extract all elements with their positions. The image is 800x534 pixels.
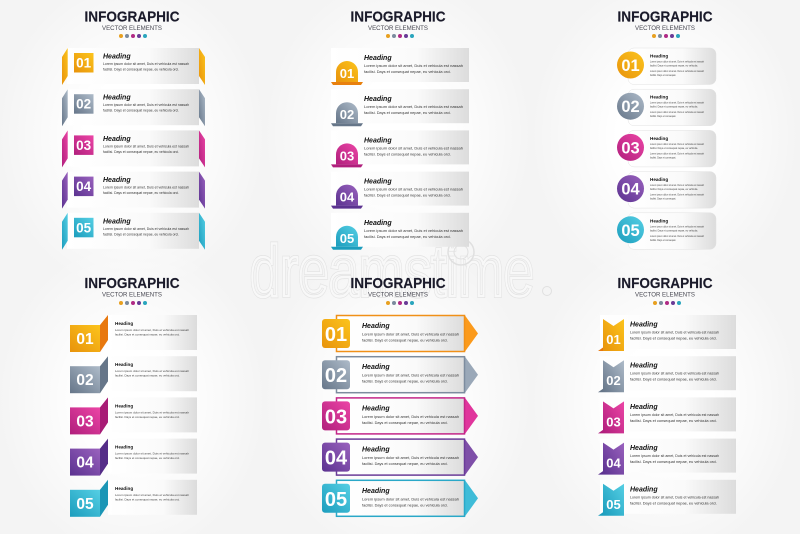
row 01: Lorem ipsum dolor sit amet. Duis et vehicula est nassah xyxy=(650,60,704,64)
row 02: facilisi. Days et consequat nepae, eu vehicula orci. xyxy=(362,380,448,384)
row 04: Lorem ipsum dolor sit amet. Duis et vehicula est nassah xyxy=(650,183,704,187)
row 02 xyxy=(598,356,736,392)
title: VECTOR ELEMENTS xyxy=(368,292,429,298)
row 04: 04 xyxy=(621,181,640,199)
row 03: 03 xyxy=(621,139,640,157)
row 03: Lorem ipsum dolor sit amet, Duis et vehicula est nassah xyxy=(364,146,463,150)
row 01: 01 xyxy=(76,56,92,70)
row 01 xyxy=(331,48,469,85)
row 02: 02 xyxy=(76,372,94,389)
row 02: Lorem ipsum dolor sit amet, Duis et vehicula est nassah xyxy=(115,369,189,373)
row 02 xyxy=(617,89,716,126)
row 03: Lorem ipsum dolor sit amet, Duis et vehicula est nassah xyxy=(630,413,719,417)
row 05: facilisi. Days et consequat nepae, eu vehicula. xyxy=(650,228,698,232)
row 04: Heading xyxy=(115,445,133,450)
row 02: Lorem ipsum dolor sit amet, Duis et vehicula est nassah xyxy=(364,105,463,109)
row 03: facilisi. Days et consequat nepae, eu vehicula orci. xyxy=(362,421,448,425)
row 01: facilisi. Days et consequat nepae, eu vehicula orci. xyxy=(364,70,451,74)
row 01 xyxy=(598,315,736,351)
row 05: Lorem ipsum dolor sit amet, Duis et vehicula est nassah xyxy=(364,229,463,233)
row 05: Lorem ipsum dolor sit amet, Duis et vehicula est nassah xyxy=(103,227,189,231)
row 05: 05 xyxy=(606,497,621,512)
row 02: 02 xyxy=(340,107,354,122)
row 03: Lorem ipsum dolor sit amet. Duis et vehicula est nassah xyxy=(650,151,704,155)
row 04 xyxy=(322,439,478,475)
row 04 xyxy=(62,172,205,209)
row 01: Heading xyxy=(364,55,392,62)
row 03: Heading xyxy=(650,136,668,141)
row 03: 03 xyxy=(325,406,347,428)
row 01: Lorem ipsum dolor sit amet. Duis et vehicula est nassah xyxy=(650,69,704,73)
row 02: Heading xyxy=(364,96,392,103)
row 04: Lorem ipsum dolor sit amet, Duis et vehicula est nassah xyxy=(364,188,463,192)
panel: bell badge list xyxy=(331,8,469,250)
row 03: facilisi. Days et consequat. xyxy=(650,155,676,159)
title: VECTOR ELEMENTS xyxy=(102,25,163,32)
row 02 xyxy=(70,356,197,393)
row 01: facilisi. Days et consequat nepae, eu vehicula orci. xyxy=(103,68,179,72)
row 02: Lorem ipsum dolor sit amet. Duis et vehicula est nassah xyxy=(650,101,704,105)
row 04 xyxy=(331,172,469,209)
row 02: Heading xyxy=(630,363,658,370)
row 05: Heading xyxy=(364,220,392,227)
row 04: facilisi. Days et consequat nepae, eu vehicula orci. xyxy=(630,460,717,464)
row 05: Lorem ipsum dolor sit amet. Duis et vehicula est nassah xyxy=(650,224,704,228)
row 03: 03 xyxy=(606,414,621,429)
row 02: facilisi. Days et consequat nepae, eu vehicula orci. xyxy=(364,111,451,115)
row 02: Heading xyxy=(362,364,390,371)
row 05: 05 xyxy=(325,489,347,511)
panel: ribbon-fold list xyxy=(62,8,205,250)
row 01: Heading xyxy=(650,54,668,58)
title xyxy=(618,8,713,38)
row 05: Lorem ipsum dolor sit amet. Duis et vehicula est nassah xyxy=(650,234,704,238)
row 02: 02 xyxy=(621,98,640,116)
title xyxy=(84,275,180,305)
row 02: Heading xyxy=(115,362,133,367)
title: INFOGRAPHIC xyxy=(618,275,713,292)
row 02 xyxy=(322,357,478,393)
row 01 xyxy=(617,48,716,84)
row 03: 03 xyxy=(76,413,94,430)
row 04: 04 xyxy=(325,448,348,470)
row 05 xyxy=(322,480,478,516)
row 01: facilisi. Days et consequat nepae, eu vehicula orci. xyxy=(362,338,448,342)
row 05: facilisi. Days et consequat nepae, eu vehicula orci. xyxy=(103,232,179,236)
row 04: facilisi. Days et consequat nepae, eu vehicula orci. xyxy=(362,462,448,466)
row 05 xyxy=(617,213,716,249)
title: INFOGRAPHIC xyxy=(84,8,180,26)
row 02: Lorem ipsum dolor sit amet, Duis et vehicula est nassah xyxy=(630,372,719,376)
row 03 xyxy=(598,397,736,433)
row 03: facilisi. Days et consequat nepae, eu vehicula orci. xyxy=(103,150,179,154)
row 05: Heading xyxy=(362,488,390,495)
row 01 xyxy=(70,315,197,352)
row 02: facilisi. Days et consequat nepae, eu vehicula orci. xyxy=(115,374,180,378)
row 01: 01 xyxy=(340,66,354,81)
row 05: Heading xyxy=(115,486,133,491)
row 02: Lorem ipsum dolor sit amet, Duis et vehicula est nassah xyxy=(103,103,189,107)
row 02: facilisi. Days et consequat nepae, eu vehicula. xyxy=(650,105,698,109)
row 05: facilisi. Days et consequat. xyxy=(650,238,676,242)
row 04: Heading xyxy=(362,447,390,454)
row 02: 02 xyxy=(606,373,621,388)
row 04: Lorem ipsum dolor sit amet, Duis et vehicula est nassah xyxy=(630,454,719,458)
row 04: 04 xyxy=(76,179,92,194)
row 01: facilisi. Days et consequat nepae, eu vehicula orci. xyxy=(630,336,717,340)
title xyxy=(350,8,446,38)
row 05: facilisi. Days et consequat nepae, eu vehicula orci. xyxy=(630,501,717,505)
title: VECTOR ELEMENTS xyxy=(102,292,163,298)
row 05: facilisi. Days et consequat nepae, eu vehicula orci. xyxy=(115,497,180,501)
row 02: 02 xyxy=(325,365,347,387)
title: INFOGRAPHIC xyxy=(618,8,713,26)
title: INFOGRAPHIC xyxy=(350,275,446,292)
watermark: dreamstime xyxy=(250,232,534,312)
row 01: Heading xyxy=(115,321,133,326)
title xyxy=(618,275,713,305)
row 04: Lorem ipsum dolor sit amet, Duis et vehicula est nassah xyxy=(103,186,189,190)
row 05: facilisi. Days et consequat nepae, eu vehicula orci. xyxy=(362,503,448,507)
row 04: 04 xyxy=(340,190,355,205)
row 01: facilisi. Days et consequat nepae, eu vehicula orci. xyxy=(115,332,180,336)
row 02: Heading xyxy=(650,95,668,100)
row 04: Lorem ipsum dolor sit amet, Duis et vehicula est nassah xyxy=(362,456,459,460)
row 03: Lorem ipsum dolor sit amet, Duis et vehicula est nassah xyxy=(115,410,189,414)
row 02: facilisi. Days et consequat nepae, eu vehicula orci. xyxy=(103,109,179,113)
row 05: 05 xyxy=(340,231,354,246)
row 04 xyxy=(598,439,736,475)
row 03: Heading xyxy=(630,404,658,411)
title xyxy=(350,275,446,305)
row 01: Lorem ipsum dolor sit amet, Duis et vehicula est nassah xyxy=(103,62,189,66)
row 02: Lorem ipsum dolor sit amet. Duis et vehicula est nassah xyxy=(650,110,704,114)
row 01: Lorem ipsum dolor sit amet, Duis et vehicula est nassah xyxy=(630,330,719,334)
row 03: 03 xyxy=(340,148,354,163)
row 05: facilisi. Days et consequat nepae, eu vehicula orci. xyxy=(364,235,451,239)
row 05: Lorem ipsum dolor sit amet, Duis et vehicula est nassah xyxy=(630,495,719,499)
row 05 xyxy=(70,480,197,517)
row 04: 04 xyxy=(76,455,94,472)
row 03: facilisi. Days et consequat nepae, eu vehicula orci. xyxy=(115,415,180,419)
row 03: Heading xyxy=(115,403,133,408)
title: VECTOR ELEMENTS xyxy=(635,292,696,298)
row 01 xyxy=(322,316,478,352)
row 04: Heading xyxy=(103,177,131,184)
panel: circle badge list xyxy=(617,8,716,249)
row 02 xyxy=(331,89,469,126)
row 01: facilisi. Days et consequat nepae, eu vehicula. xyxy=(650,64,698,68)
row 03 xyxy=(62,130,205,167)
row 03: Heading xyxy=(103,136,131,143)
row 04: facilisi. Days et consequat nepae, eu vehicula orci. xyxy=(115,456,180,460)
row 05: Heading xyxy=(650,218,668,223)
row 04: facilisi. Days et consequat nepae, eu vehicula orci. xyxy=(364,194,451,198)
row 05: 05 xyxy=(76,220,92,235)
row 05: Lorem ipsum dolor sit amet, Duis et vehicula est nassah xyxy=(362,497,459,501)
row 01: Heading xyxy=(362,323,390,330)
panel: arrow list xyxy=(322,275,478,516)
row 01: Lorem ipsum dolor sit amet, Duis et vehicula est nassah xyxy=(115,328,189,332)
row 03 xyxy=(322,398,478,434)
row 02: Lorem ipsum dolor sit amet, Duis et vehicula est nassah xyxy=(362,374,459,378)
row 01: 01 xyxy=(76,331,94,348)
row 01: Heading xyxy=(630,322,658,328)
row 03: Heading xyxy=(364,137,392,144)
row 01: 01 xyxy=(621,57,640,75)
row 04: facilisi. Days et consequat nepae, eu vehicula. xyxy=(650,187,698,191)
title: VECTOR ELEMENTS xyxy=(635,25,696,32)
row 05 xyxy=(62,213,205,250)
panel: notched ribbon list xyxy=(598,275,736,516)
row 05: Heading xyxy=(630,486,658,493)
row 05: 05 xyxy=(621,222,640,240)
row 03: Lorem ipsum dolor sit amet, Duis et vehicula est nassah xyxy=(362,415,459,419)
row 04: 04 xyxy=(606,456,621,471)
row 01: facilisi. Days et consequat. xyxy=(650,73,676,77)
row 03 xyxy=(331,130,469,167)
row 01: 01 xyxy=(325,324,347,346)
title xyxy=(84,8,180,38)
row 02: 02 xyxy=(76,97,91,112)
row 02 xyxy=(62,89,205,126)
row 04 xyxy=(617,172,716,208)
row 01: Lorem ipsum dolor sit amet, Duis et vehicula est nassah xyxy=(364,64,463,68)
row 05 xyxy=(598,480,736,516)
row 02: facilisi. Days et consequat nepae, eu vehicula orci. xyxy=(630,378,717,382)
row 03: Heading xyxy=(362,405,390,412)
row 02: Heading xyxy=(103,95,131,102)
panel: 3D box list xyxy=(70,275,197,517)
row 04: Heading xyxy=(650,177,668,182)
title: VECTOR ELEMENTS xyxy=(368,25,429,32)
row 04: Heading xyxy=(630,445,658,452)
row 01 xyxy=(62,48,205,85)
title: INFOGRAPHIC xyxy=(350,8,446,26)
row 03: Lorem ipsum dolor sit amet. Duis et vehicula est nassah xyxy=(650,142,704,146)
row 02: facilisi. Days et consequat. xyxy=(650,114,676,118)
row 04: facilisi. Days et consequat. xyxy=(650,197,676,201)
row 01: Heading xyxy=(103,54,131,60)
row 04 xyxy=(70,439,197,476)
row 05: Heading xyxy=(103,218,131,225)
row 04: Lorem ipsum dolor sit amet. Duis et vehicula est nassah xyxy=(650,193,704,197)
row 03: facilisi. Days et consequat nepae, eu vehicula. xyxy=(650,146,698,150)
row 03 xyxy=(70,397,197,434)
row 04: facilisi. Days et consequat nepae, eu vehicula orci. xyxy=(103,191,179,195)
watermark: dreamstime xyxy=(250,232,534,312)
row 03: facilisi. Days et consequat nepae, eu vehicula orci. xyxy=(630,419,717,423)
row 04: Lorem ipsum dolor sit amet, Duis et vehicula est nassah xyxy=(115,452,189,456)
row 01: Lorem ipsum dolor sit amet, Duis et vehicula est nassah xyxy=(362,332,459,336)
row 01: 01 xyxy=(606,332,621,347)
row 03: facilisi. Days et consequat nepae, eu vehicula orci. xyxy=(364,152,451,156)
row 05 xyxy=(331,213,469,250)
row 03: 03 xyxy=(76,138,92,153)
row 03: Lorem ipsum dolor sit amet, Duis et vehicula est nassah xyxy=(103,144,189,148)
row 03 xyxy=(617,130,716,167)
row 04: Heading xyxy=(364,179,392,186)
row 05: Lorem ipsum dolor sit amet, Duis et vehicula est nassah xyxy=(115,493,189,497)
row 05: 05 xyxy=(76,496,94,513)
title: INFOGRAPHIC xyxy=(84,275,180,292)
